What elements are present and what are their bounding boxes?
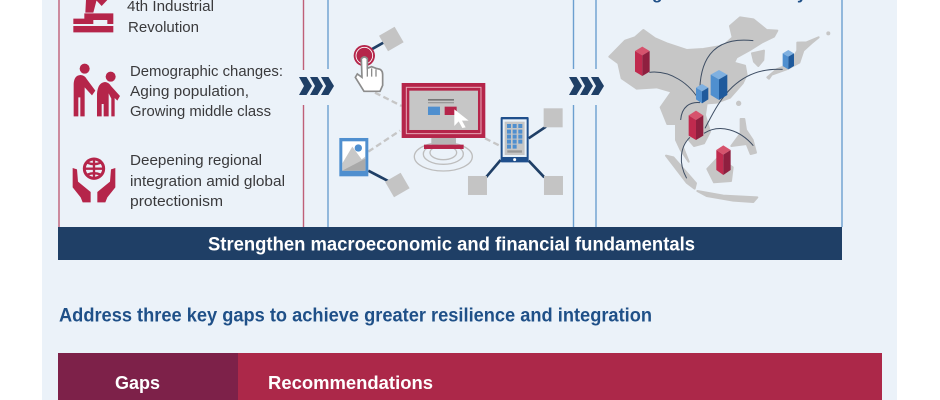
- icon: industrial revolution: [73, 0, 113, 32]
- text: 4th Industrial Revolution: [127, 0, 214, 36]
- illustration: Asia map with value chain links: [609, 17, 829, 202]
- text: regional integration: protectionism: [130, 194, 223, 210]
- panel: middle column frame: [328, 0, 574, 227]
- panel: right column frame: [596, 0, 842, 227]
- dashed connectors: [368, 93, 502, 152]
- text: regional integration: Deepening regional: [130, 153, 262, 169]
- solid connectors: [368, 43, 546, 182]
- bars: [635, 47, 794, 175]
- trade links: [649, 40, 783, 178]
- arrow: chevrons middle to right: [569, 77, 604, 95]
- icon: photo: [339, 138, 368, 176]
- text: regional integration: [130, 153, 285, 210]
- text: 4th Industrial Revolution: Revolution: [128, 20, 199, 36]
- icon: click button: [354, 45, 375, 66]
- table header: recommendations: Recommendations: [268, 373, 433, 393]
- icon: demographic changes people: [74, 64, 120, 116]
- table header: recommendations: [238, 353, 882, 400]
- banner: strengthen fundamentals: Strengthen macroeconomic and financial fundamentals: [208, 234, 695, 256]
- banner: strengthen fundamentals: [58, 227, 842, 260]
- icon: hands holding globe: [73, 158, 115, 202]
- text: demographic changes: Aging population,: [130, 84, 249, 100]
- arrow: chevrons left to middle: [299, 77, 334, 95]
- icon: tablet: [501, 117, 529, 162]
- map landmass: [609, 17, 829, 202]
- table header: gaps: Gaps: [115, 373, 160, 393]
- text: demographic changes: Demographic changes:: [130, 64, 283, 80]
- heading: address three key gaps: Address three key gaps to achieve greater resilience and integration: [59, 306, 652, 326]
- panel: left column frame: [59, 0, 304, 227]
- text: demographic changes: [130, 64, 283, 120]
- text: demographic changes: Growing middle class: [130, 104, 271, 120]
- icon: pointing hand: [355, 57, 383, 91]
- icon: monitor: [402, 83, 485, 171]
- text: regional integration: integration amid global: [130, 174, 285, 190]
- table header: gaps: [58, 353, 238, 400]
- grey nodes: [379, 27, 563, 197]
- illustration: digital technology network: [339, 27, 563, 197]
- column heading clipped at top edge: [652, 0, 807, 3]
